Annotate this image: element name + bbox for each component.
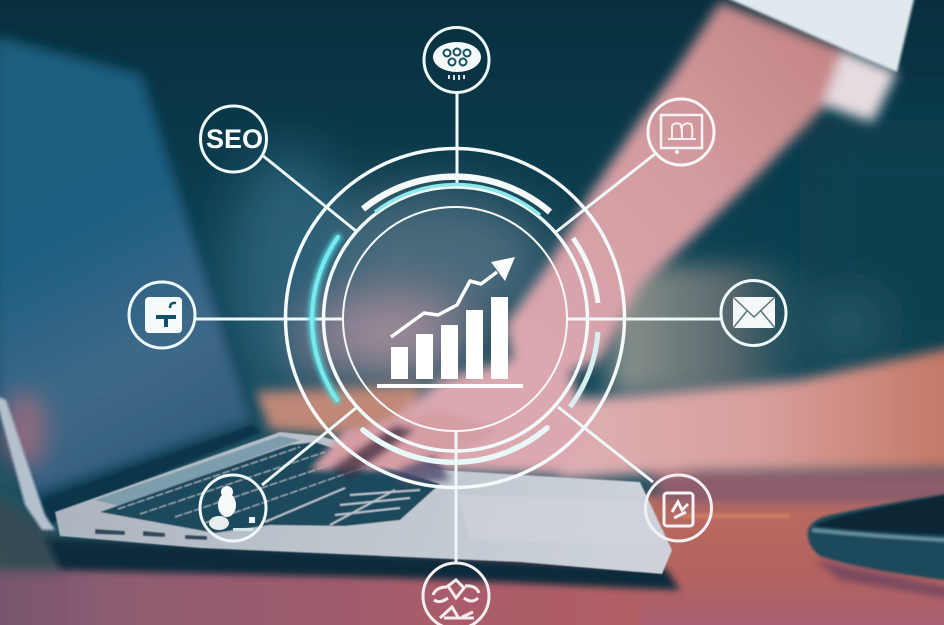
phone on table (808, 492, 944, 600)
sleeve (720, 0, 915, 72)
node: envelope icon (721, 280, 786, 346)
back of desk (255, 385, 420, 440)
node: SEO: SEO (206, 124, 263, 154)
hub connector lines (196, 93, 721, 563)
node: person at computer icon (200, 475, 266, 541)
laptop base (55, 432, 672, 574)
node: brain cloud icon (424, 28, 489, 92)
node: monitor icon (648, 99, 714, 165)
desk dark left corner (0, 490, 60, 572)
desk (0, 495, 944, 625)
node: puzzle app icon (129, 282, 195, 348)
band under arm (650, 472, 944, 503)
laptop screen (0, 35, 262, 530)
node: tablet icon (646, 475, 712, 541)
node: SEO (200, 106, 266, 172)
raised arm (505, 2, 850, 395)
central hub rings (286, 148, 624, 488)
lower arm (560, 346, 944, 480)
growth bar chart with arrow (377, 257, 523, 388)
fingers (310, 410, 500, 485)
node: network emblem icon (423, 563, 489, 625)
sleeve cuff (823, 50, 897, 122)
laptop shadow (45, 538, 680, 590)
grey window area (610, 265, 810, 395)
